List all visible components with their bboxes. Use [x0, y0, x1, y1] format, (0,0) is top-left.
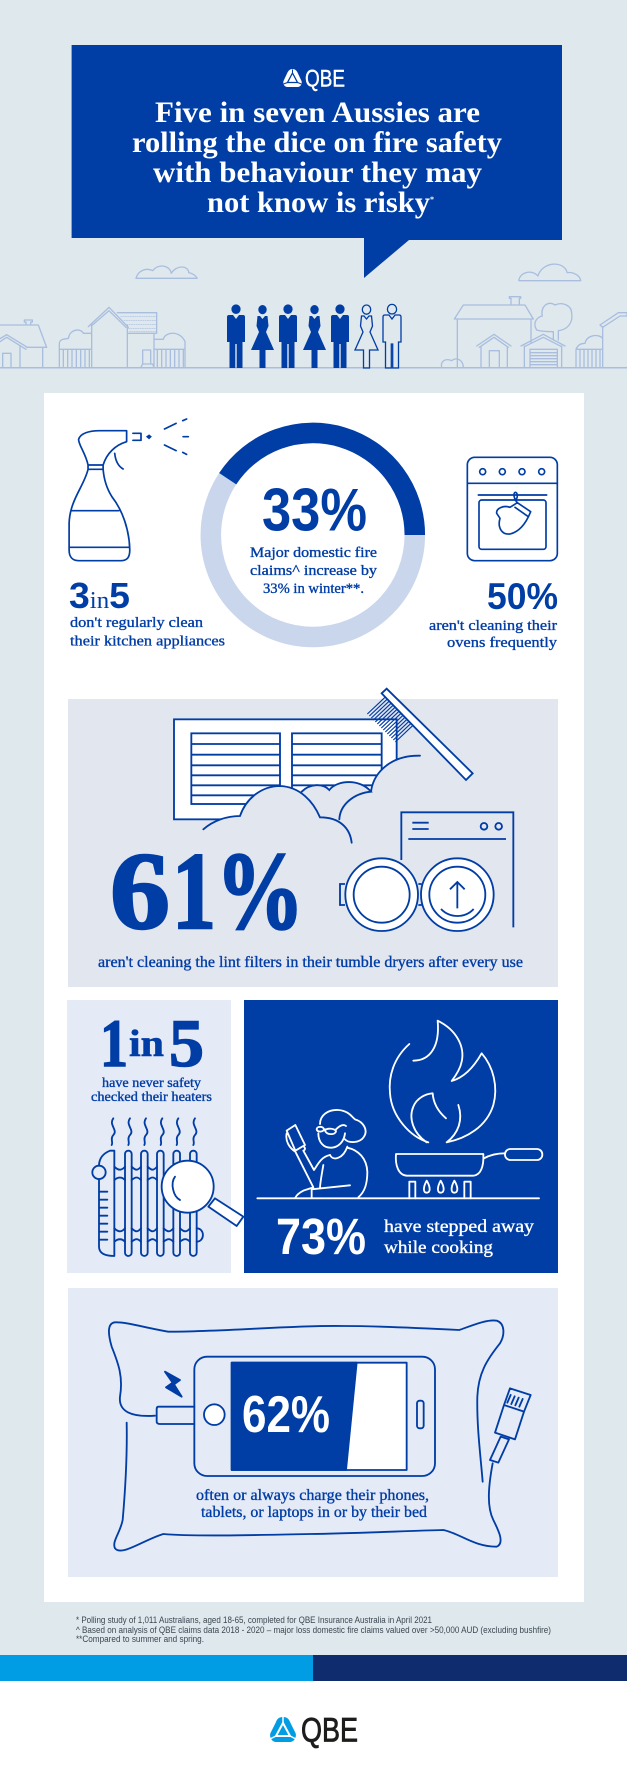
person filled [279, 304, 297, 368]
caption: 33% in winter**. [263, 581, 364, 597]
person filled [227, 304, 245, 368]
icon: flame and pan on stove [257, 1021, 542, 1198]
left houses [0, 307, 185, 368]
caption [91, 1075, 212, 1104]
caption: aren't cleaning their [429, 618, 557, 634]
caption: claims^ increase by [250, 563, 378, 579]
number: in [129, 1023, 164, 1065]
person filled [251, 305, 274, 368]
title: not know is risky [207, 186, 430, 219]
footnotes: * Polling study of 1,011 Australians, aged 18-65, completed for QBE Insurance Australia in April 2021 [76, 1615, 432, 1625]
footnotes [76, 1615, 551, 1644]
number: % [216, 830, 304, 952]
right cloud [519, 264, 581, 281]
footnotes: **Compared to summer and spring. [76, 1634, 204, 1644]
caption [429, 618, 558, 651]
panel: charging in bed 62% [68, 1288, 558, 1577]
QBE logo footer: QBE [301, 1712, 358, 1750]
number: 73% [276, 1208, 366, 1265]
caption: have never safety [102, 1075, 201, 1090]
caption: Major domestic fire [250, 545, 377, 561]
number: 3in5 [69, 575, 130, 616]
five in seven people [227, 304, 401, 368]
person outline [355, 305, 378, 368]
left cloud [136, 266, 197, 278]
donut chart 33% [211, 433, 415, 637]
clouds [136, 264, 581, 281]
number: 6 [110, 830, 170, 952]
number: 62% [242, 1386, 330, 1444]
caption: aren't cleaning the lint filters in their tumble dryers after every use [98, 954, 523, 971]
number: 1 [100, 1005, 128, 1081]
person filled [303, 305, 326, 368]
number: 33% [262, 477, 367, 544]
caption: ovens frequently [447, 635, 558, 651]
title [132, 96, 502, 219]
footer colour band [0, 1655, 627, 1681]
caption: often or always charge their phones, [196, 1487, 429, 1504]
caption: have stepped away [384, 1216, 534, 1236]
person outline [383, 304, 401, 368]
icon: radiator and magnifier [92, 1118, 243, 1256]
icon: vent, brush, lint cloud, dryer [174, 689, 513, 931]
number [100, 1005, 204, 1081]
caption [70, 615, 225, 650]
QBE logo, white [283, 66, 345, 92]
panel: heaters 1 in 5 [67, 1000, 243, 1273]
title: rolling the dice on fire safety [132, 126, 502, 159]
header speech bubble [72, 45, 562, 278]
stat: 50% oven [429, 457, 558, 651]
caption: tablets, or laptops in or by their bed [201, 1504, 427, 1521]
caption [196, 1487, 429, 1521]
panel: lint filters 61% [68, 689, 558, 987]
stat: 3 in 5 spray bottle [69, 419, 225, 650]
main white panel [44, 393, 584, 1602]
title: with behaviour they may [153, 156, 482, 189]
number: 5 [169, 1005, 204, 1081]
icon: woman with phone [286, 1110, 367, 1198]
icon: spray bottle [69, 419, 188, 561]
panel: stepped away while cooking 73% [244, 1000, 558, 1273]
caption [384, 1216, 534, 1257]
number: 1 [172, 830, 216, 952]
title: Five in seven Aussies are [155, 96, 480, 129]
footnotes: ^ Based on analysis of QBE claims data 2018 - 2020 – major loss domestic fire claims valued over >50,000 AUD (excluding bushfire) [76, 1625, 551, 1635]
caption: don't regularly clean [70, 615, 204, 631]
QBE logo footer [270, 1712, 358, 1750]
person filled [331, 304, 349, 368]
number: 50% [487, 576, 558, 617]
icon: pillow, phone, charger cable [109, 1320, 531, 1551]
caption [250, 545, 378, 597]
caption: checked their heaters [91, 1089, 212, 1104]
caption: while cooking [384, 1237, 493, 1257]
QBE logo, white: QBE [305, 66, 345, 92]
number [110, 830, 304, 952]
right houses [441, 297, 627, 368]
caption: their kitchen appliances [70, 634, 225, 650]
icon: oven with mitt [467, 457, 557, 561]
title: * [430, 195, 434, 204]
